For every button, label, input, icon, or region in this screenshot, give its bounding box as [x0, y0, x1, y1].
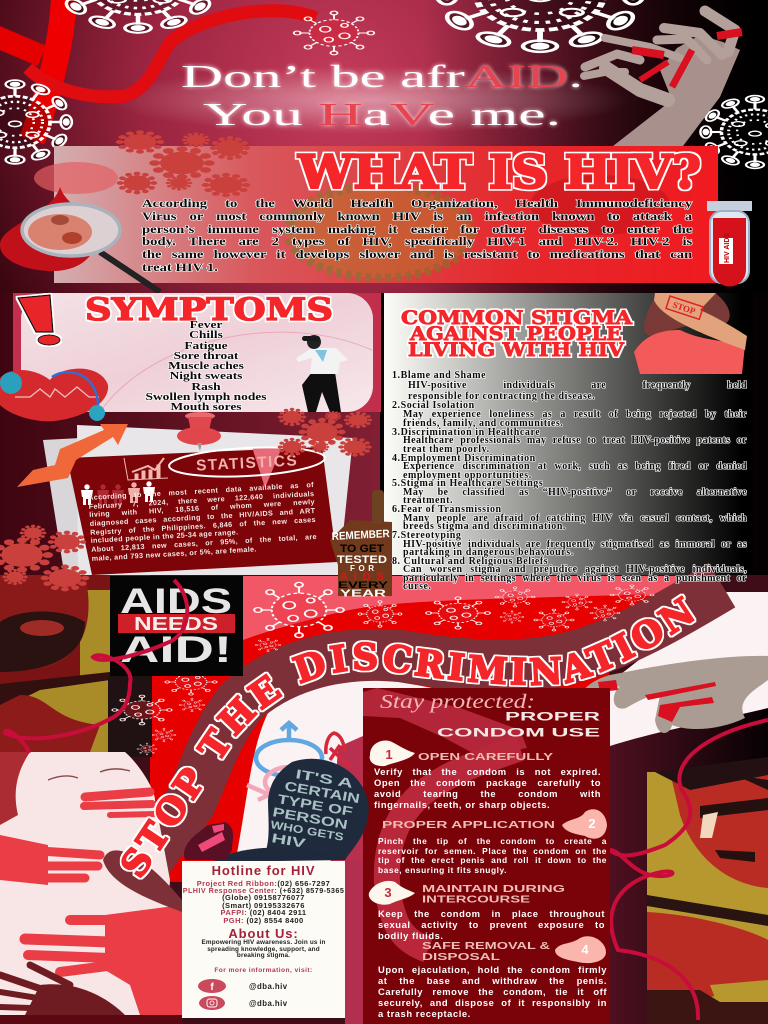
stigma list: 3.Discrimination in Healthcare — [392, 426, 540, 438]
icon: crouching figure — [184, 822, 233, 860]
icon: row of people — [81, 481, 155, 505]
statistics text: Registry of the Philippines. 6,846 of the new cases — [90, 515, 316, 537]
what is HIV text block: person’s immune system making it easier for other diseases to enter the — [142, 222, 692, 236]
stigma list: responsible for contracting the disease. — [408, 390, 595, 402]
bottom background — [0, 575, 768, 1024]
condom step 1 text: fingernails, teeth, or sharp objects. — [374, 799, 550, 810]
stigma list: partaking in dangerous behaviours. — [403, 547, 574, 558]
statistics text: living with HIV, 18,516 of whom were newly — [89, 497, 315, 519]
icon: remember to get tested poster: TESTED — [337, 554, 387, 566]
main title — [181, 58, 583, 132]
panel: common stigma background — [384, 293, 753, 592]
icons: white-pink virus over red area — [152, 582, 654, 742]
condom step 1 text: Verify that the condom is not expired. — [374, 766, 601, 777]
stigma list: breeds stigma and discrimination. — [403, 521, 566, 532]
heading: proper condom use: CONDOM USE — [437, 726, 600, 740]
step 4 heading: SAFE REMOVAL & — [422, 940, 551, 952]
stigma list: May experience loneliness as a result of being rejected by their — [403, 408, 747, 420]
what is HIV text block: Virus or most commonly known HIV is an infection known to attack a — [142, 209, 692, 223]
social icons: f — [210, 982, 214, 993]
icon: step 2 blob: 2 — [588, 816, 596, 831]
step 4 heading: DISPOSAL — [422, 951, 501, 963]
icon: woman with stop hand: STOP — [671, 300, 697, 317]
condom step 2 text: base, ensuring it fits snugly. — [378, 865, 507, 875]
icon: step 2 blob — [562, 809, 607, 839]
panel: symptoms — [13, 293, 381, 412]
heading: symptoms: SYMPTOMS — [85, 292, 333, 328]
icon: orange zigzag arrow — [17, 424, 128, 487]
stigma list: friends, family, and communities. — [403, 418, 563, 428]
icon: aids needs aid poster — [110, 576, 243, 676]
panel: hotline card — [182, 860, 363, 1024]
icons: white virus drawings top — [0, 0, 768, 168]
statistics text: diagnosed cases according to the HIV/AIDS and ART — [89, 506, 316, 528]
icon: remember to get tested poster: EVERY — [338, 580, 388, 590]
icon: step 3 blob: 3 — [384, 885, 392, 900]
hotline text block: (Smart) 09195332676 — [222, 901, 305, 910]
icon: step 1 blob: 1 — [385, 747, 393, 762]
art: face with hands covering mouth — [0, 752, 182, 1024]
stigma list: 2.Social Isolation — [392, 400, 475, 411]
stigma list: employment opportunities. — [403, 470, 532, 480]
statistics text — [88, 480, 317, 562]
hotline text block: Empowering HIV awareness. Join us in — [201, 939, 326, 946]
icon: certain type of person head: CERTAIN — [283, 778, 361, 806]
icon: hand with red ribbon top — [584, 11, 742, 146]
what is HIV text block — [141, 196, 693, 274]
stigma list: 7.Stereotyping — [392, 530, 461, 540]
condom step 4 text: Upon ejaculation, hold the condom firmly — [378, 964, 607, 974]
background: white swoosh — [232, 592, 768, 880]
hotline text block: @dba.hiv — [249, 982, 288, 991]
stigma list: Experience discrimination at work, such as being fired or denied — [403, 461, 747, 472]
icon: heart with stethoscope — [0, 369, 108, 421]
condom step 4 text: a trash receptacle. — [378, 1008, 471, 1018]
panel: condom use — [363, 688, 610, 1024]
stop banner band — [130, 585, 722, 890]
mid background — [0, 293, 768, 593]
icon: aids needs aid poster: AIDS — [120, 582, 232, 621]
stigma list: 8. Cultural and Religious Beliefs — [392, 556, 548, 566]
heading: proper condom use — [437, 710, 601, 740]
condom step 1 text: Open the condom package carefully to — [374, 777, 601, 788]
symptoms list: Rash — [191, 382, 221, 393]
icon: blood test tube — [707, 201, 752, 286]
step 3 heading: MAINTAIN DURING — [422, 883, 565, 895]
heading: common stigma: AGAINST PEOPLE — [409, 323, 622, 345]
stigma list: HIV-positive individuals are frequently held — [408, 380, 747, 390]
condom step 4 text — [378, 964, 607, 1019]
stigma list: 1.Blame and Shame — [392, 370, 486, 381]
what is HIV text block: body. There are 2 types of HIV, specifically HIV-1 and HIV-2. HIV-2 is — [142, 234, 692, 248]
hotline text block: About Us: — [228, 926, 299, 941]
condom step 2 text: tip of the erect penis and roll it down to the — [378, 855, 607, 865]
condom step 3 text: sexual activity to prevent exposure to — [378, 918, 605, 930]
icon: person coughing — [296, 335, 348, 412]
condom step 2 text — [378, 836, 607, 875]
hotline text block: spreading knowledge, support, and — [207, 946, 320, 953]
icon: aids needs aid poster: NEEDS — [134, 614, 218, 634]
hotline text block: PGH: (02) 8554 8400 — [223, 916, 304, 925]
icon: gender symbols and ribbon — [247, 723, 350, 800]
header background — [0, 0, 768, 300]
icon: remember to get tested poster: REMEMBER — [331, 528, 390, 543]
step 3 heading — [422, 883, 565, 906]
heading: statistics: STATISTICS — [196, 452, 299, 475]
heading: common stigma: COMMON STIGMA — [401, 307, 632, 329]
stop the discrimination banner text: STOP THE DISCRIMINATION — [120, 594, 696, 880]
icon: step 4 blob — [555, 936, 606, 963]
step 1 heading: OPEN CAREFULLY — [418, 751, 553, 763]
statistics text: February 7, 2024, there were 122,640 individuals — [88, 489, 315, 511]
stigma list: treatment. — [403, 495, 453, 506]
condom step 3 text: bodily fluids. — [378, 930, 444, 940]
heading: stay protected: Stay protected: — [380, 691, 535, 713]
heading: what is HIV: WHAT IS HIV? — [297, 145, 701, 199]
what is HIV text block: the same however it develops slower and is resistant to medications that can — [142, 247, 692, 261]
icon: hand with ribbon lower right — [578, 656, 768, 733]
curly ribbons — [5, 580, 768, 1020]
step 4 heading — [422, 940, 551, 963]
symptoms list: Swollen lymph nodes — [146, 392, 266, 403]
heading: common stigma — [401, 307, 632, 361]
main title: Don’t be afr AID . — [181, 58, 583, 94]
poster art: bearded man collage — [0, 575, 152, 757]
condom step 4 text: Carefully remove the condom, tie it off — [378, 986, 607, 996]
icon: white virus on dark art — [112, 695, 172, 755]
stigma list: curse. — [403, 581, 432, 592]
icons: red virus cluster statistics — [279, 408, 371, 456]
hotline text block: PAFPI: (02) 8404 2911 — [220, 908, 307, 917]
right poster art — [647, 757, 768, 1024]
hotline text block — [183, 863, 344, 1008]
statistics text: According to the most recent data available as of — [88, 480, 314, 502]
icon: certain type of person head — [212, 759, 369, 862]
stigma list: HIV-positive individuals are frequently stigmatised as immoral or as — [403, 538, 747, 550]
heading: proper condom use: PROPER — [505, 710, 601, 724]
icon: step 4 blob: 4 — [581, 942, 589, 957]
panel: statistics note — [43, 425, 353, 593]
symptoms list: Chills — [189, 330, 223, 341]
icon: blood drop and magnifier — [0, 187, 160, 292]
symptoms list: Mouth sores — [170, 402, 242, 413]
condom step 3 text — [378, 908, 605, 941]
social icons — [198, 979, 226, 1010]
hotline text block: For more information, visit: — [214, 967, 313, 974]
hotline text block: (Globe) 09158776077 — [222, 893, 305, 902]
icon: blood test tube: HIV AIDS — [724, 233, 731, 263]
panel: what is HIV background — [34, 146, 718, 283]
heading: common stigma: LIVING WITH HIV — [408, 339, 625, 361]
icon: push pin — [177, 412, 221, 451]
what is HIV text block: According to the World Health Organization, Health Immunodeficiency — [142, 196, 692, 210]
icon: certain type of person head: HIV — [270, 830, 307, 851]
main title: You H a V e me. — [203, 96, 561, 132]
symptoms list: Muscle aches — [168, 361, 244, 372]
icon: exclamation mark — [18, 295, 60, 345]
statistics text: About 12,813 new cases, or 95%, of the total, are — [91, 532, 317, 554]
heading: statistics — [168, 444, 326, 480]
stigma list: treat them poorly. — [403, 444, 490, 454]
icon: step 1 blob — [370, 741, 415, 766]
icon: certain type of person head: IT'S A — [294, 766, 355, 791]
condom step 4 text: securely, and dispose of it responsibly in — [378, 996, 607, 1008]
stigma list: particularly in settings where the virus is seen as a punishment or — [403, 572, 747, 584]
symptoms list: Night sweats — [170, 371, 242, 382]
statistics text: included people in the 25-34 age range. — [90, 528, 239, 545]
what is HIV text block: treat HIV-1. — [142, 260, 218, 274]
condom step 3 text: Keep the condom in place throughout — [378, 908, 605, 918]
stigma list: 5.Stigma in Healthcare Settings — [392, 478, 543, 489]
condom step 2 text: Pinch the tip of the condom to create a — [378, 836, 607, 846]
icon: certain type of person head: WHO GETS — [269, 819, 344, 844]
hotline text block: PLHIV Response Center: (+632) 8579-5365 — [183, 886, 344, 895]
icon: remember to get tested poster: YEAR — [340, 588, 387, 600]
stigma list: Many people are afraid of catching HIV via casual contact, which — [403, 512, 747, 524]
condom step 1 text — [374, 766, 601, 810]
condom step 4 text: at the base and withdraw the penis. — [378, 974, 607, 986]
stigma list — [392, 370, 748, 592]
step 2 heading: PROPER APPLICATION — [382, 819, 555, 831]
icon: remember to get tested poster — [330, 490, 392, 600]
stigma list: Healthcare professionals may refuse to treat HIV-positive patents or — [403, 435, 747, 446]
icon: remember to get tested poster: TO GET — [340, 543, 384, 555]
symptoms list — [146, 320, 267, 413]
stigma list: 6.Fear of Transmission — [392, 504, 502, 514]
icon: step 3 blob — [369, 881, 415, 905]
icon: remember to get tested poster: FOR — [350, 564, 374, 573]
icon: certain type of person head: TYPE OF — [276, 791, 354, 819]
icons: red virus left cluster — [0, 525, 88, 590]
condom step 2 text: reservoir for semen. Place the condom on the — [378, 846, 607, 856]
hotline text block: breaking stigma. — [237, 952, 290, 959]
symptoms list: Fever — [190, 320, 222, 331]
icon: certain type of person head: PERSON — [271, 804, 349, 832]
symptoms list: Fatigue — [184, 341, 228, 352]
condom step 1 text: avoid tearing the condom with — [374, 788, 601, 799]
hotline text block: Hotline for HIV — [212, 863, 315, 878]
hotline text block: @dba.hiv — [249, 999, 288, 1008]
icon: woman with stop hand — [634, 293, 747, 374]
stigma list: May be classified as “HIV-positive” or receive alternative — [403, 486, 747, 498]
statistics text: male, and 793 new cases, or 5%, are female. — [91, 544, 257, 562]
step 3 heading: INTERCOURSE — [422, 894, 530, 906]
hotline text block: Project Red Ribbon:(02) 656-7297 — [197, 879, 330, 888]
icon: chart bars — [124, 458, 168, 480]
stigma list: Can worsen stigma and prejudice against HIV-positive individuals, — [403, 564, 747, 575]
icon: red awareness ribbon — [0, 0, 316, 140]
symptoms list: Sore throat — [174, 351, 238, 362]
icon: aids needs aid poster: AID! — [120, 629, 232, 670]
icon: remember to get tested poster: AIDS — [340, 571, 384, 583]
icons: red virus cluster — [117, 131, 249, 196]
stigma list: 4.Employment Discrimination — [392, 452, 536, 464]
